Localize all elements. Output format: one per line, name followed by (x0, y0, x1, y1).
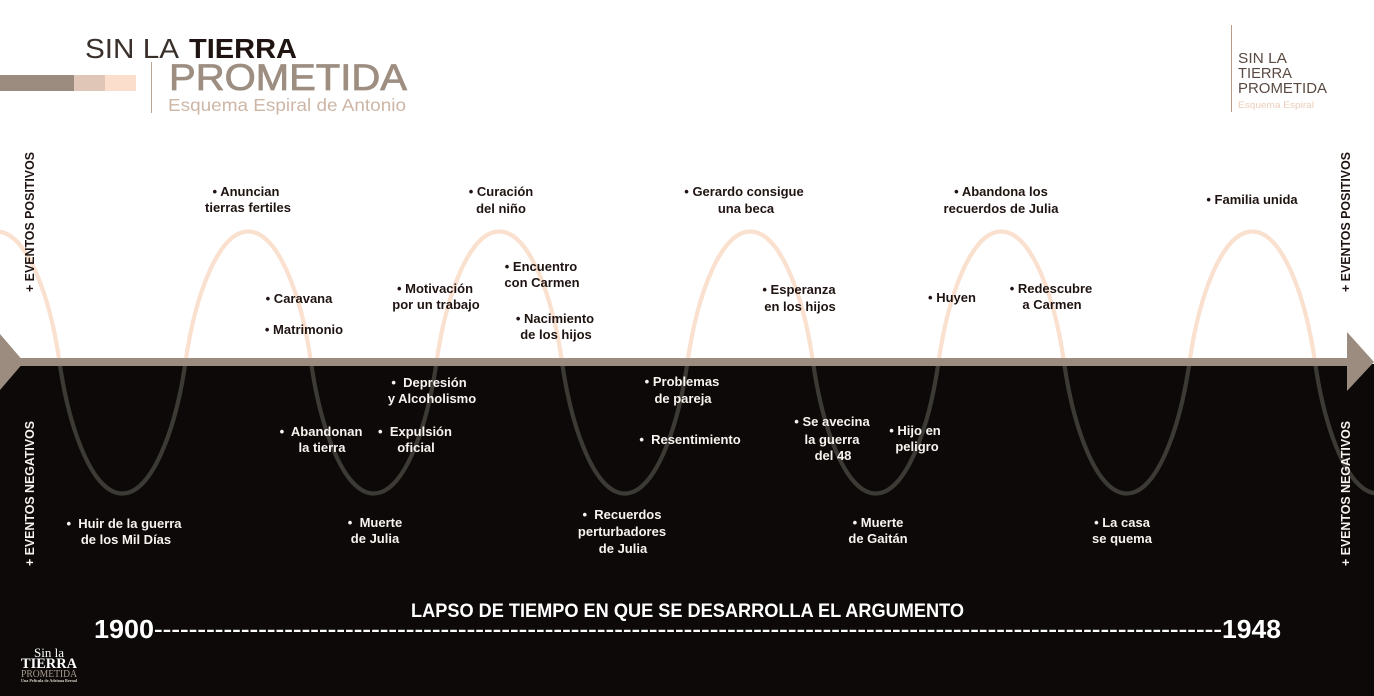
event: abandona los recuerdos de julia: • Abandona los (954, 184, 1048, 199)
event: esperanza en los hijos (762, 282, 836, 314)
event: abandonan la tierra: la tierra (299, 440, 346, 455)
event: recuerdos perturbadores de julia: perturbadores (578, 524, 666, 539)
event: anuncian tierras fertiles (205, 184, 291, 215)
event: hijo en peligro: • Hijo en (889, 423, 941, 438)
event: recuerdos perturbadores de julia: de Julia (599, 541, 648, 556)
event: gerardo consigue una beca (684, 184, 804, 216)
event: muerte de julia: • Muerte (348, 515, 402, 530)
event: familia unida: • Familia unida (1206, 192, 1298, 207)
header: right title block: PROMETIDA (1238, 81, 1327, 97)
event: la casa se quema: • La casa (1094, 515, 1151, 530)
negative events labels (66, 374, 1153, 556)
event: muerte de julia (348, 515, 402, 546)
timeline years: 1948 (1222, 614, 1281, 644)
event: hijo en peligro: peligro (895, 439, 939, 454)
event: curacion del nino: • Curación (469, 184, 533, 199)
header: right title block: SIN LA (1238, 51, 1287, 67)
header: main title block (0, 33, 407, 115)
event: huyen: • Huyen (928, 290, 976, 305)
event: anuncian tierras fertiles: tierras fertiles (205, 200, 291, 215)
timeline axis arrow (0, 332, 1374, 391)
event: huir de la guerra: • Huir de la guerra (66, 516, 182, 531)
side label: negative left: + EVENTOS NEGATIVOS (23, 421, 37, 566)
event: expulsion oficial: oficial (397, 440, 435, 455)
event: problemas de pareja: de pareja (654, 391, 712, 406)
event: expulsion oficial: • Expulsión (378, 424, 452, 439)
event: recuerdos perturbadores de julia (578, 507, 666, 556)
event: recuerdos perturbadores de julia: • Recuerdos (583, 507, 661, 522)
title: sin la tierra: SIN LA (85, 33, 180, 64)
color bars (0, 75, 136, 91)
logo: sin la tierra prometida: PROMETIDA (21, 668, 77, 680)
side label: positive right: + EVENTOS POSITIVOS (1339, 152, 1353, 292)
event: anuncian tierras fertiles: • Anuncian (213, 184, 280, 199)
event: esperanza en los hijos: • Esperanza (762, 282, 836, 297)
logo: sin la tierra prometida: TIERRA (21, 656, 77, 672)
logo: sin la tierra prometida (21, 645, 78, 683)
logo: sin la tierra prometida: Una Película de Adriana Bernal (21, 678, 78, 683)
event: muerte de gaitan (848, 515, 908, 546)
event: encuentro con carmen: con Carmen (504, 275, 580, 290)
event: nacimiento de los hijos (516, 311, 594, 342)
event: redescubre a carmen (1010, 281, 1092, 312)
event: depresion y alcoholismo: y Alcoholismo (388, 391, 476, 406)
event: huir de la guerra: de los Mil Días (81, 532, 171, 547)
event: caravana: • Caravana (266, 291, 333, 306)
event: muerte de gaitan: • Muerte (853, 515, 903, 530)
timeline years (94, 614, 1281, 644)
event: se avecina la guerra del 48: • Se avecina (794, 414, 870, 429)
event: nacimiento de los hijos: • Nacimiento (516, 311, 594, 326)
positive events labels (205, 184, 1298, 342)
heading: time span: LAPSO DE TIEMPO EN QUE SE DESARROLLA EL ARGUMENTO (411, 600, 964, 622)
event: gerardo consigue una beca: una beca (718, 201, 775, 216)
event: motivacion por un trabajo (392, 281, 480, 312)
event: encuentro con carmen: • Encuentro (505, 259, 577, 274)
event: curacion del nino (469, 184, 533, 216)
event: muerte de gaitan: de Gaitán (848, 531, 908, 546)
event: se avecina la guerra del 48 (794, 414, 870, 463)
event: depresion y alcoholismo (388, 375, 476, 406)
event: redescubre a carmen: a Carmen (1022, 297, 1082, 312)
event: expulsion oficial (378, 424, 452, 455)
event: problemas de pareja (645, 374, 719, 406)
event: se avecina la guerra del 48: del 48 (815, 448, 851, 463)
chart: positive wave arcs (0, 232, 1315, 362)
event: nacimiento de los hijos: de los hijos (520, 327, 592, 342)
event: abandona los recuerdos de julia (944, 184, 1059, 216)
event: esperanza en los hijos: en los hijos (764, 299, 836, 314)
title: prometida: PROMETIDA (169, 56, 407, 98)
header: right title block: Esquema Espiral (1238, 100, 1314, 111)
event: encuentro con carmen (504, 259, 580, 290)
event: abandona los recuerdos de julia: recuerdos de Julia (944, 201, 1059, 216)
event: matrimonio: • Matrimonio (265, 322, 343, 337)
event: muerte de julia: de Julia (351, 531, 400, 546)
logo: sin la tierra prometida: Sin la (34, 645, 64, 660)
event: huir de la guerra (66, 516, 182, 547)
event: gerardo consigue una beca: • Gerardo consigue (684, 184, 804, 199)
event: resentimiento: • Resentimiento (639, 432, 741, 447)
chart: negative wave arcs (60, 362, 1374, 494)
timeline years: --------------------------------------------------------------------------------------------------------------------------- (154, 618, 1222, 640)
header: right title block (1231, 25, 1327, 112)
event: se avecina la guerra del 48: la guerra (805, 432, 860, 447)
title: sin la tierra (85, 33, 297, 64)
event: curacion del nino: del niño (476, 201, 526, 216)
panel: negative events background (0, 364, 1374, 696)
event: depresion y alcoholismo: • Depresión (391, 375, 467, 390)
title: sin la tierra: TIERRA (189, 33, 297, 64)
side label: positive left: + EVENTOS POSITIVOS (23, 152, 37, 292)
header: right title block: TIERRA (1238, 66, 1292, 82)
event: hijo en peligro (889, 423, 941, 454)
event: la casa se quema: se quema (1092, 531, 1153, 546)
event: motivacion por un trabajo: por un trabajo (392, 297, 480, 312)
timeline years: 1900 (94, 614, 154, 644)
subtitle: Esquema Espiral de Antonio (168, 95, 406, 115)
event: abandonan la tierra (280, 424, 362, 455)
event: motivacion por un trabajo: • Motivación (397, 281, 473, 296)
event: redescubre a carmen: • Redescubre (1010, 281, 1092, 296)
event: abandonan la tierra: • Abandonan (280, 424, 362, 439)
side label: negative right: + EVENTOS NEGATIVOS (1339, 421, 1353, 566)
event: la casa se quema (1092, 515, 1153, 546)
event: problemas de pareja: • Problemas (645, 374, 719, 389)
